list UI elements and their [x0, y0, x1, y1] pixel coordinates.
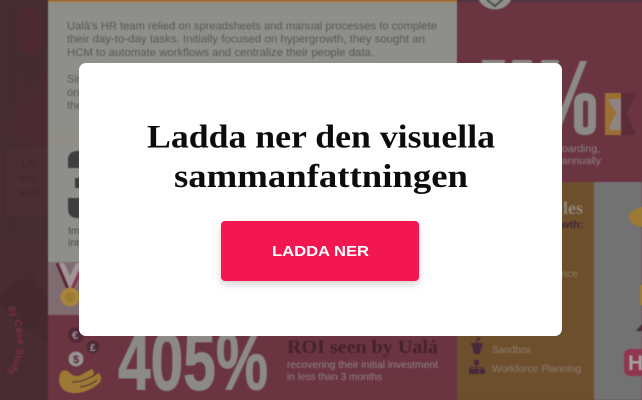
- panel: onboarding stat: [457, 0, 642, 182]
- download button: LADDA NER: [272, 243, 369, 260]
- badge: [624, 349, 642, 376]
- icon: coins and hand: €: [72, 330, 78, 342]
- ROI caption: in less than 3 months: [287, 371, 382, 383]
- icon: coins and hand: £: [90, 343, 96, 354]
- stat caption: [562, 143, 602, 167]
- paragraph one: Sin: [67, 74, 83, 86]
- paragraph one: HCM to automate workflows and centralize their people data.: [67, 47, 374, 59]
- circular label: case study: dy Case Study: [8, 306, 24, 376]
- heading: modules: les: [563, 198, 583, 218]
- stat caption: [68, 225, 80, 249]
- stat: percent: [482, 60, 596, 135]
- icon: coins and hand: [59, 327, 101, 393]
- heading: ROI: ROI seen by Ualá: [287, 338, 438, 358]
- icon: coins and hand: $: [73, 354, 79, 366]
- stat caption: oarding,: [562, 143, 600, 155]
- stat: big number: [68, 151, 82, 218]
- panel: award band: [48, 262, 457, 315]
- icon: org chart: [469, 360, 485, 374]
- label: workforce planning: Workforce Planning: [492, 363, 581, 375]
- modal title: [147, 120, 495, 195]
- icon: medal: [56, 263, 84, 306]
- panel: modules: nce: [561, 268, 578, 280]
- download button: [221, 221, 419, 281]
- icon: hourglass: [605, 93, 636, 135]
- paragraph one: Ualá’s HR team relied on spreadsheets and manual processes to complete: [67, 20, 437, 32]
- panel: ROI: [48, 315, 457, 400]
- ROI caption: [287, 359, 438, 383]
- paragraph one: on: [67, 87, 79, 99]
- modal title: sammanfattningen: [174, 159, 468, 195]
- modal title: Ladda ner den visuella: [147, 120, 495, 156]
- icon: sandbox pot: [471, 337, 483, 354]
- ROI caption: recovering their initial investment: [287, 359, 438, 371]
- paragraph one: the: [67, 100, 82, 112]
- speech bubble text: Lo: [21, 156, 36, 170]
- stat caption: int: [68, 237, 79, 249]
- modal: [79, 63, 562, 336]
- panel: left photo strip: ven: [18, 185, 39, 199]
- panel: left photo strip: [0, 0, 48, 400]
- panel: left photo strip: est: [19, 171, 36, 185]
- panel: mascot: [594, 182, 642, 400]
- icon: top badge: [476, 0, 514, 10]
- paragraph one: their day-to-day tasks. Initially focused on hypergrowth, they sought an: [67, 34, 425, 46]
- panel: modules: owth:: [555, 219, 583, 231]
- paragraph one: [67, 20, 437, 112]
- panel: challenge text: [48, 0, 457, 262]
- stat caption: Im: [68, 225, 80, 237]
- stat caption: annually: [562, 155, 602, 167]
- panel: modules: [457, 180, 594, 400]
- label: sandbox: Sandbox: [492, 344, 532, 356]
